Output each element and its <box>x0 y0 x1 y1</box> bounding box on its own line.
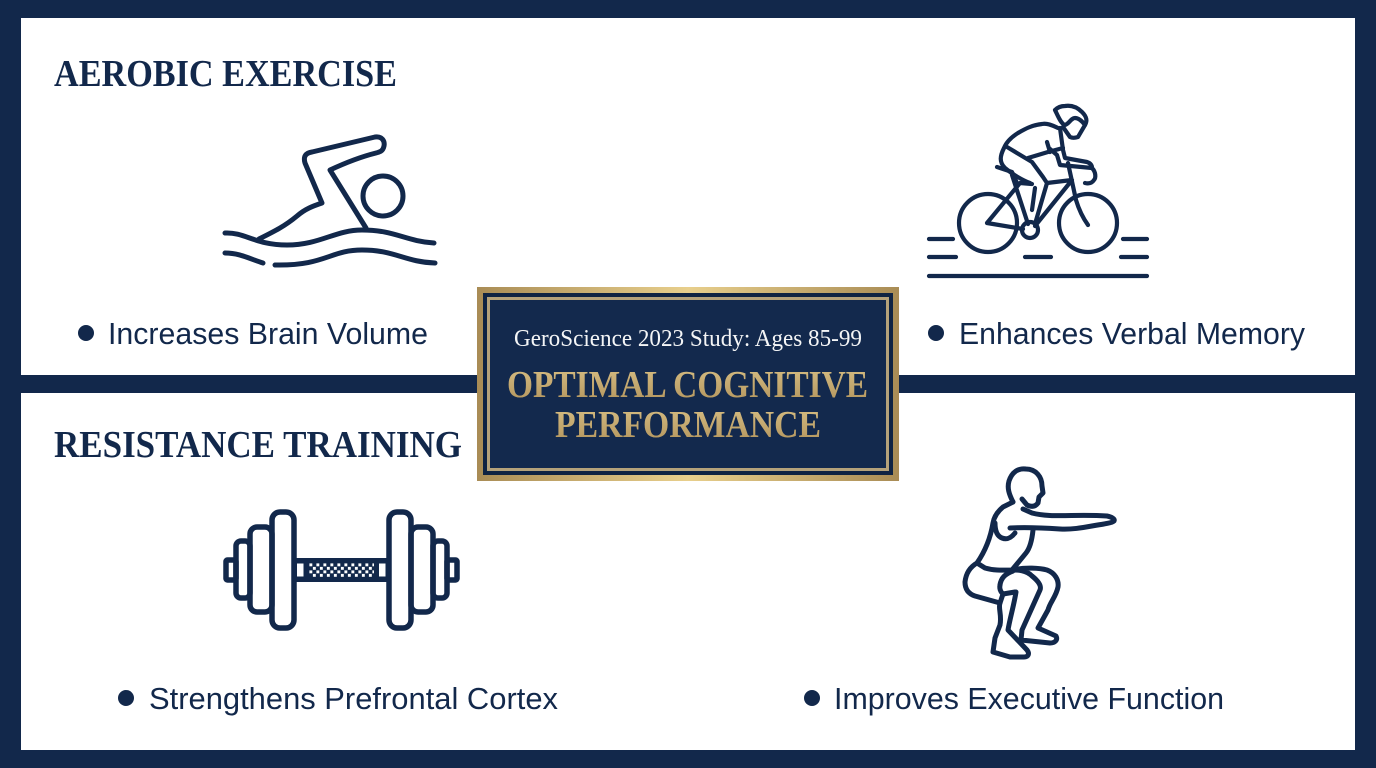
bullet: enhances verbal memory: Enhances Verbal Memory <box>959 316 1305 351</box>
panel: resistance training <box>21 393 1355 750</box>
icon: squatting figure <box>965 469 1114 657</box>
panel: aerobic exercise <box>21 18 1355 375</box>
plaque subtitle: GeroScience 2023 Study: Ages 85-99 <box>514 326 862 352</box>
bullet: improves executive function: Improves Executive Function <box>834 681 1224 716</box>
icon: swimmer <box>225 137 435 265</box>
plaque title: OPTIMAL COGNITIVE <box>507 364 868 406</box>
central plaque <box>477 287 899 481</box>
bullet: strengthens prefrontal cortex: Strengthens Prefrontal Cortex <box>149 681 558 716</box>
heading: resistance training: RESISTANCE TRAINING <box>54 424 462 466</box>
heading: aerobic exercise: AEROBIC EXERCISE <box>54 53 397 95</box>
icon: cyclist <box>929 106 1147 276</box>
icon: dumbbell <box>226 512 457 628</box>
plaque title <box>507 364 868 446</box>
bullet: increases brain volume: Increases Brain Volume <box>108 316 428 351</box>
plaque title: PERFORMANCE <box>555 404 821 446</box>
